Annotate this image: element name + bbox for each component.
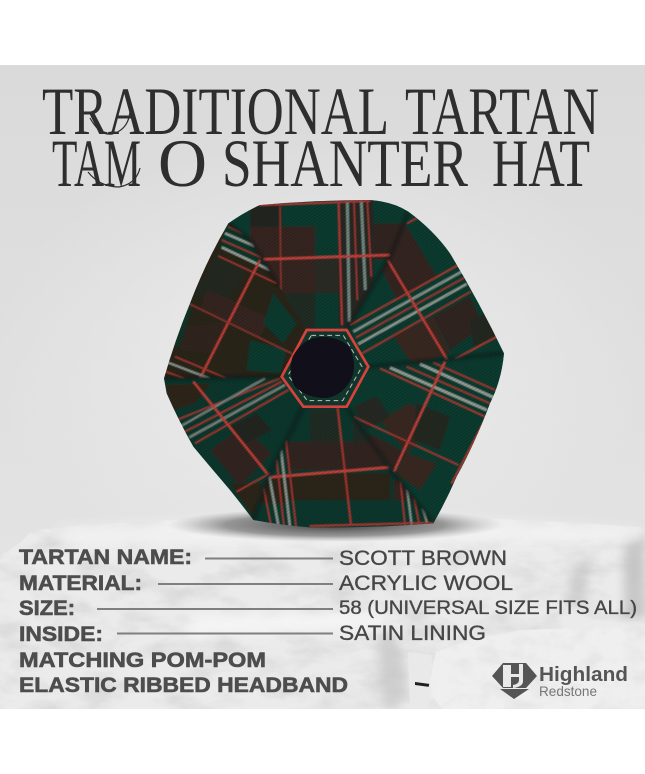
label: material: MATERIAL: bbox=[19, 572, 142, 595]
title line 1: TRADITIONAL bbox=[42, 73, 389, 149]
label: matching pom-pom: MATCHING POM-POM bbox=[19, 649, 266, 672]
hat darkening overlay bbox=[157, 193, 510, 533]
logo subtitle: Redstone bbox=[539, 683, 597, 699]
hat twill texture bbox=[157, 193, 510, 533]
panel: upper right wedge bbox=[349, 217, 497, 363]
label: tartan name: TARTAN NAME: bbox=[19, 546, 192, 569]
rock plinth bbox=[0, 515, 645, 709]
panel: lower left wedge bbox=[165, 377, 290, 516]
title line 2: SHANTER bbox=[222, 125, 468, 201]
leader lines bbox=[97, 558, 333, 634]
panel: bottom wedge bbox=[258, 408, 434, 528]
logo mark bbox=[492, 663, 537, 699]
label: elastic headband: ELASTIC RIBBED HEADBAND bbox=[19, 674, 348, 697]
logo wordmark: Highland bbox=[539, 664, 628, 686]
title line 2: TAM bbox=[52, 125, 141, 201]
value: satin lining: SATIN LINING bbox=[339, 622, 486, 645]
title line 2: HAT bbox=[492, 125, 590, 201]
hat bbox=[157, 193, 510, 533]
pom-pom bbox=[290, 337, 354, 398]
value: size: 58 (UNIVERSAL SIZE FITS ALL) bbox=[339, 598, 637, 619]
title line 2: O bbox=[158, 125, 207, 201]
hat base bbox=[164, 202, 501, 379]
hat shadow bbox=[167, 508, 503, 542]
hat pleat shadows bbox=[164, 212, 504, 523]
panel: upper left wedge bbox=[160, 220, 313, 380]
centre hexagon band bbox=[282, 330, 368, 407]
title line 2 bbox=[52, 125, 590, 201]
label: size: SIZE: bbox=[19, 597, 75, 620]
specification labels bbox=[19, 546, 348, 697]
value: scott brown: SCOTT BROWN bbox=[339, 547, 507, 570]
panel: lower right wedge bbox=[352, 360, 496, 490]
label: inside: INSIDE: bbox=[19, 623, 103, 646]
logo: Highland Redstone bbox=[492, 663, 628, 699]
value: acrylic wool: ACRYLIC WOOL bbox=[339, 572, 513, 595]
title bbox=[42, 73, 599, 201]
panel: top wedge bbox=[250, 200, 406, 328]
specification values bbox=[339, 547, 637, 645]
